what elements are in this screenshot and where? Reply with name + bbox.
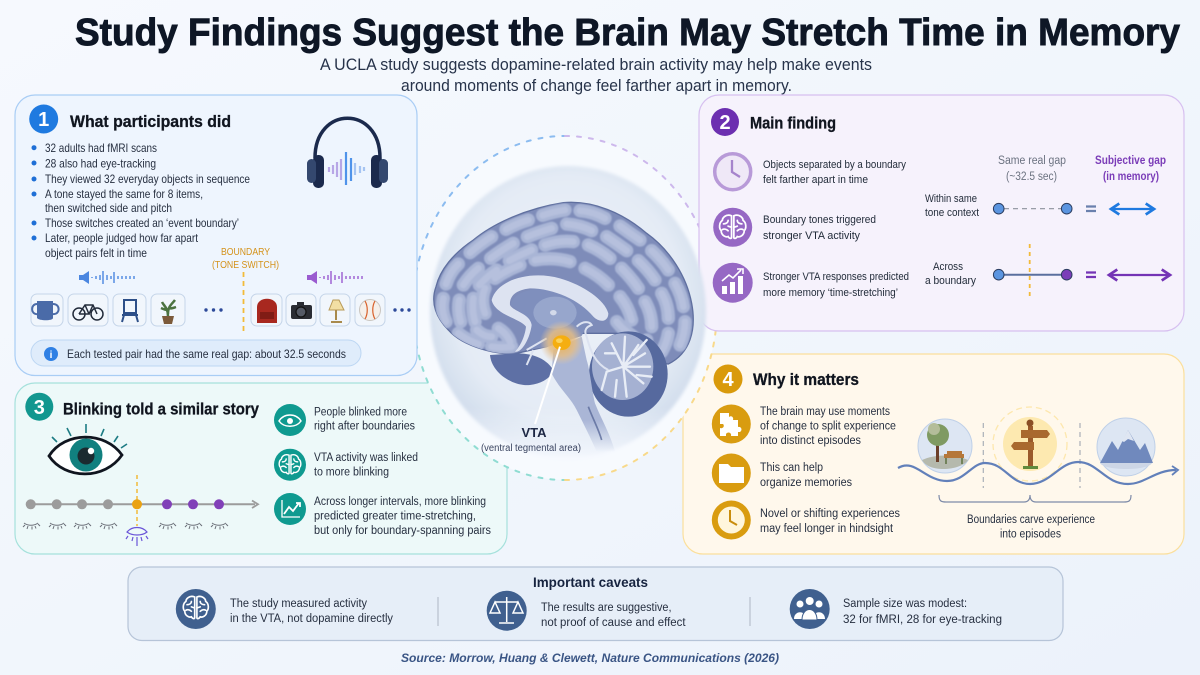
column header: subjective gap	[1095, 155, 1166, 183]
bullet list: A tone stayed the same for 8 items,	[45, 187, 203, 201]
why it matters text: This can help	[760, 462, 823, 474]
icon: clock	[715, 154, 751, 190]
lower temporal lobe	[490, 353, 553, 385]
badge 4	[714, 364, 742, 394]
source line: Source: Morrow, Huang & Clewett, Nature Communications (2026)	[401, 651, 779, 665]
heading: blinking: Blinking told a similar story	[63, 400, 259, 418]
bullet list: Later, people judged how far apart	[45, 231, 199, 245]
blinking findings text: to more blinking	[314, 466, 389, 478]
boundary label	[212, 246, 279, 271]
ellipsis	[204, 308, 223, 312]
blinking findings text: People blinked more	[314, 406, 407, 418]
caveat: sample size	[843, 598, 1002, 626]
icon: eye badge	[274, 404, 306, 436]
VTA label: (ventral tegmental area)	[481, 443, 581, 454]
bullet list: 32 adults had fMRI scans	[45, 141, 157, 155]
heading: important caveats: Important caveats	[533, 575, 648, 590]
main finding text: Boundary tones triggered	[763, 214, 876, 226]
panel: main finding	[699, 95, 1184, 331]
why it matters text: into distinct episodes	[760, 435, 861, 447]
bullet list: 28 also had eye-tracking	[45, 156, 156, 170]
blinking findings text: predicted greater time-stretching,	[314, 510, 476, 522]
icon: clock	[712, 500, 751, 540]
object sequence after boundary	[251, 294, 385, 326]
subtitle: around moments of change feel farther apart in memory.	[401, 77, 792, 95]
corpus callosum	[492, 275, 608, 352]
info pill: Each tested pair had the same real gap: about 32.5 seconds	[67, 347, 346, 361]
why it matters text	[760, 406, 900, 535]
icon: rising bar chart	[713, 263, 753, 303]
blinking findings text: right after boundaries	[314, 420, 415, 432]
badge 3: 3	[34, 397, 45, 419]
column header: same real gap: (~32.5 sec)	[1006, 171, 1057, 183]
icon: eye	[49, 424, 127, 474]
brain	[434, 202, 693, 452]
dashed ring	[413, 136, 717, 480]
info pill	[31, 340, 361, 366]
badge 2	[711, 108, 739, 136]
icon: brain	[176, 589, 216, 629]
row label: across a boundary	[925, 261, 976, 287]
row label: within same tone context: Within same	[925, 193, 977, 205]
central brain illustration	[427, 163, 709, 461]
caveat: VTA activity: in the VTA, not dopamine directly	[230, 613, 393, 625]
halo behind brain	[413, 136, 717, 480]
badge 4: 4	[722, 369, 734, 391]
ellipsis	[393, 308, 411, 312]
scene: signpost	[993, 407, 1067, 481]
panel: why it matters	[683, 354, 1184, 554]
row label: within same tone context: tone context	[925, 207, 979, 219]
info pill: i	[50, 350, 53, 361]
blinking findings text: Across longer intervals, more blinking	[314, 496, 486, 508]
why it matters text: may feel longer in hindsight	[760, 523, 894, 535]
bullet list: They viewed 32 everyday objects in sequence	[45, 172, 250, 186]
blinking findings text: but only for boundary-spanning pairs	[314, 525, 491, 537]
icon: puzzle	[712, 404, 751, 444]
icon: brain	[713, 208, 752, 247]
backdrop disc	[427, 163, 709, 461]
inner core	[511, 289, 595, 350]
main finding text: stronger VTA activity	[763, 230, 860, 242]
icon: brain badge	[274, 449, 306, 481]
subtitle: A UCLA study suggests dopamine-related brain activity may help make events	[320, 56, 872, 74]
row: across boundary	[993, 244, 1170, 298]
icon: headphones	[307, 118, 388, 188]
blue tone wave	[79, 271, 134, 284]
cortex	[434, 202, 693, 364]
scene: tree and bench	[918, 419, 972, 473]
icon: scales	[487, 591, 527, 631]
caveat: sample size: 32 for fMRI, 28 for eye-tracking	[843, 614, 1002, 626]
why it matters text: Novel or shifting experiences	[760, 508, 900, 520]
row label: across a boundary: a boundary	[925, 275, 976, 287]
heading: why it matters: Why it matters	[753, 370, 859, 389]
column header: subjective gap: (in memory)	[1103, 171, 1159, 183]
bullet list: Those switches created an ‘event boundary’	[45, 216, 239, 230]
VTA marker	[535, 321, 584, 424]
gap comparison diagram	[925, 155, 1170, 298]
object sequence before boundary	[31, 294, 185, 326]
why it matters text: of change to split experience	[760, 420, 896, 432]
main finding text: Stronger VTA responses predicted	[763, 271, 909, 283]
caption: Boundaries carve experience	[967, 514, 1095, 526]
caption	[967, 514, 1095, 540]
subtitle	[320, 56, 872, 95]
scene: mountains	[1097, 418, 1155, 476]
main finding text: felt farther apart in time	[763, 174, 868, 186]
caveat: sample size: Sample size was modest:	[843, 598, 967, 610]
brainstem	[552, 337, 615, 452]
caveat: suggestive: The results are suggestive,	[541, 602, 672, 614]
panel: important caveats	[128, 567, 1063, 640]
title: Study Findings Suggest the Brain May Stretch Time in Memory	[75, 12, 1180, 54]
icon: folder	[712, 454, 751, 492]
badge 1	[29, 104, 58, 134]
column header: subjective gap: Subjective gap	[1095, 155, 1166, 167]
caveat: suggestive	[541, 602, 686, 629]
column header: same real gap	[998, 155, 1066, 183]
caveat: VTA activity: The study measured activity	[230, 598, 367, 610]
badge 2: 2	[719, 112, 731, 134]
blinking findings text: VTA activity was linked	[314, 452, 418, 464]
purple tone wave	[307, 271, 362, 284]
bullet list: object pairs felt in time	[45, 246, 147, 260]
row: within context	[993, 203, 1154, 214]
brace	[939, 495, 1131, 502]
caveat: suggestive: not proof of cause and effect	[541, 617, 686, 629]
icon: rising chart badge	[274, 493, 306, 525]
boundary dashed line	[242, 272, 244, 333]
column header: same real gap: Same real gap	[998, 155, 1066, 167]
dashed episode dividers	[983, 423, 1080, 488]
panel: what participants did	[15, 95, 417, 376]
boundary label: (TONE SWITCH)	[212, 259, 279, 271]
panel: blinking told a similar story	[15, 383, 507, 554]
why it matters text: organize memories	[760, 477, 852, 489]
main finding text: Objects separated by a boundary	[763, 159, 906, 171]
caveat: VTA activity	[230, 598, 393, 625]
row label: within same tone context	[925, 193, 979, 219]
row label: across a boundary: Across	[933, 261, 963, 273]
blinking findings text	[314, 406, 491, 537]
bullet list: then switched side and pitch	[45, 201, 172, 215]
VTA label	[481, 425, 581, 454]
badge 3	[25, 393, 53, 421]
icon: people	[790, 589, 830, 629]
boundary label: BOUNDARY	[221, 246, 270, 258]
wave timeline arrow	[898, 462, 1178, 484]
heading: main finding: Main finding	[750, 114, 836, 132]
bullet list	[32, 141, 250, 260]
cerebellum	[589, 331, 668, 417]
caption: into episodes	[1000, 528, 1061, 540]
VTA label: VTA	[521, 425, 547, 440]
badge 1: 1	[38, 109, 49, 131]
main finding text: more memory ‘time-stretching’	[763, 287, 898, 299]
blink timeline	[23, 475, 258, 546]
main finding text	[763, 159, 909, 299]
heading: what participants did: What participants did	[70, 112, 231, 131]
episodes diagram	[898, 407, 1178, 540]
why it matters text: The brain may use moments	[760, 406, 890, 418]
